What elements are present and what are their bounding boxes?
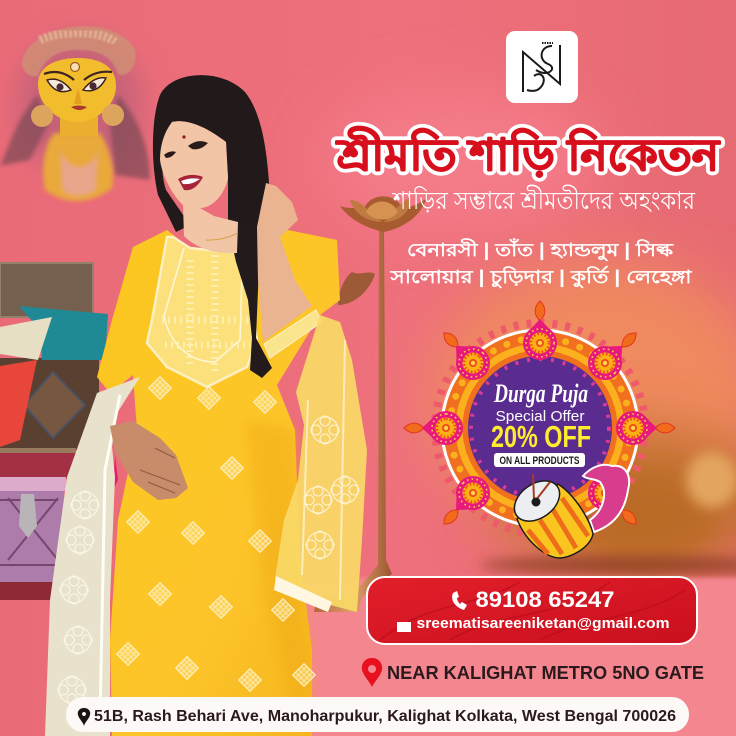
furniture: wooden trunks and cushions — [0, 263, 108, 600]
product list — [389, 238, 692, 288]
title: শ্রীমতি শাড়ি নিকেতন — [335, 126, 721, 180]
icon: red map pin — [362, 658, 382, 687]
Durga Puja offer badge — [404, 301, 675, 558]
offer text: Durga Puja — [493, 379, 588, 408]
goddess Durga portrait — [0, 26, 150, 201]
left dupatta — [45, 377, 140, 736]
tagline: শাড়ির সম্ভারে শ্রীমতীদের অহংকার — [391, 185, 696, 215]
necklace — [206, 233, 238, 240]
outer flames — [404, 301, 675, 528]
product list: সালোয়ার | চুড়িদার | কুর্তি | লেহেঙ্গা — [389, 265, 692, 288]
offer text: 20% OFF — [491, 419, 591, 454]
email: sreematisareeniketan@gmail.com — [416, 616, 670, 632]
location text: NEAR KALIGHAT METRO 5NO GATE — [387, 663, 704, 683]
right dupatta lace — [274, 340, 359, 612]
magenta lining — [113, 455, 118, 490]
right cuff — [264, 310, 322, 358]
resting hand — [110, 421, 188, 500]
shading folds — [245, 420, 312, 700]
kurta body — [97, 229, 340, 736]
envelope icon — [397, 622, 411, 632]
hair — [153, 75, 270, 262]
left dupatta lace — [58, 395, 120, 720]
ornamental rings — [435, 323, 645, 533]
product list: বেনারসী | তাঁত | হ্যান্ডলুম | সিল্ক — [407, 238, 675, 261]
flower rosettes — [422, 319, 657, 522]
phone number: 89108 65247 — [476, 587, 614, 612]
right sheer dupatta — [275, 315, 367, 612]
face and neck — [160, 121, 238, 253]
woman in yellow kurta — [45, 75, 367, 736]
offer text — [491, 379, 591, 467]
pink cloth — [583, 465, 629, 532]
brass lotus lamp — [314, 196, 426, 612]
icon: location pin — [78, 708, 90, 726]
address pill — [66, 697, 689, 732]
braid — [236, 228, 272, 378]
motifs — [117, 377, 315, 691]
eyes, bindi and lips — [164, 135, 208, 190]
address text: 51B, Rash Behari Ave, Manoharpukur, Kalighat Kolkata, West Bengal 700026 — [94, 708, 676, 725]
location line — [362, 658, 704, 687]
offer text: ON ALL PRODUCTS — [500, 455, 580, 467]
raised arm and hand — [257, 183, 312, 342]
contact panel — [367, 577, 697, 644]
phone icon — [452, 591, 467, 610]
yoke embroidery — [147, 237, 257, 387]
dhak drum — [507, 473, 593, 558]
title: শ্রীমতি শাড়ি নিকেতন — [335, 126, 721, 180]
offer text: Special Offer — [496, 408, 585, 425]
logo badge — [506, 31, 578, 103]
